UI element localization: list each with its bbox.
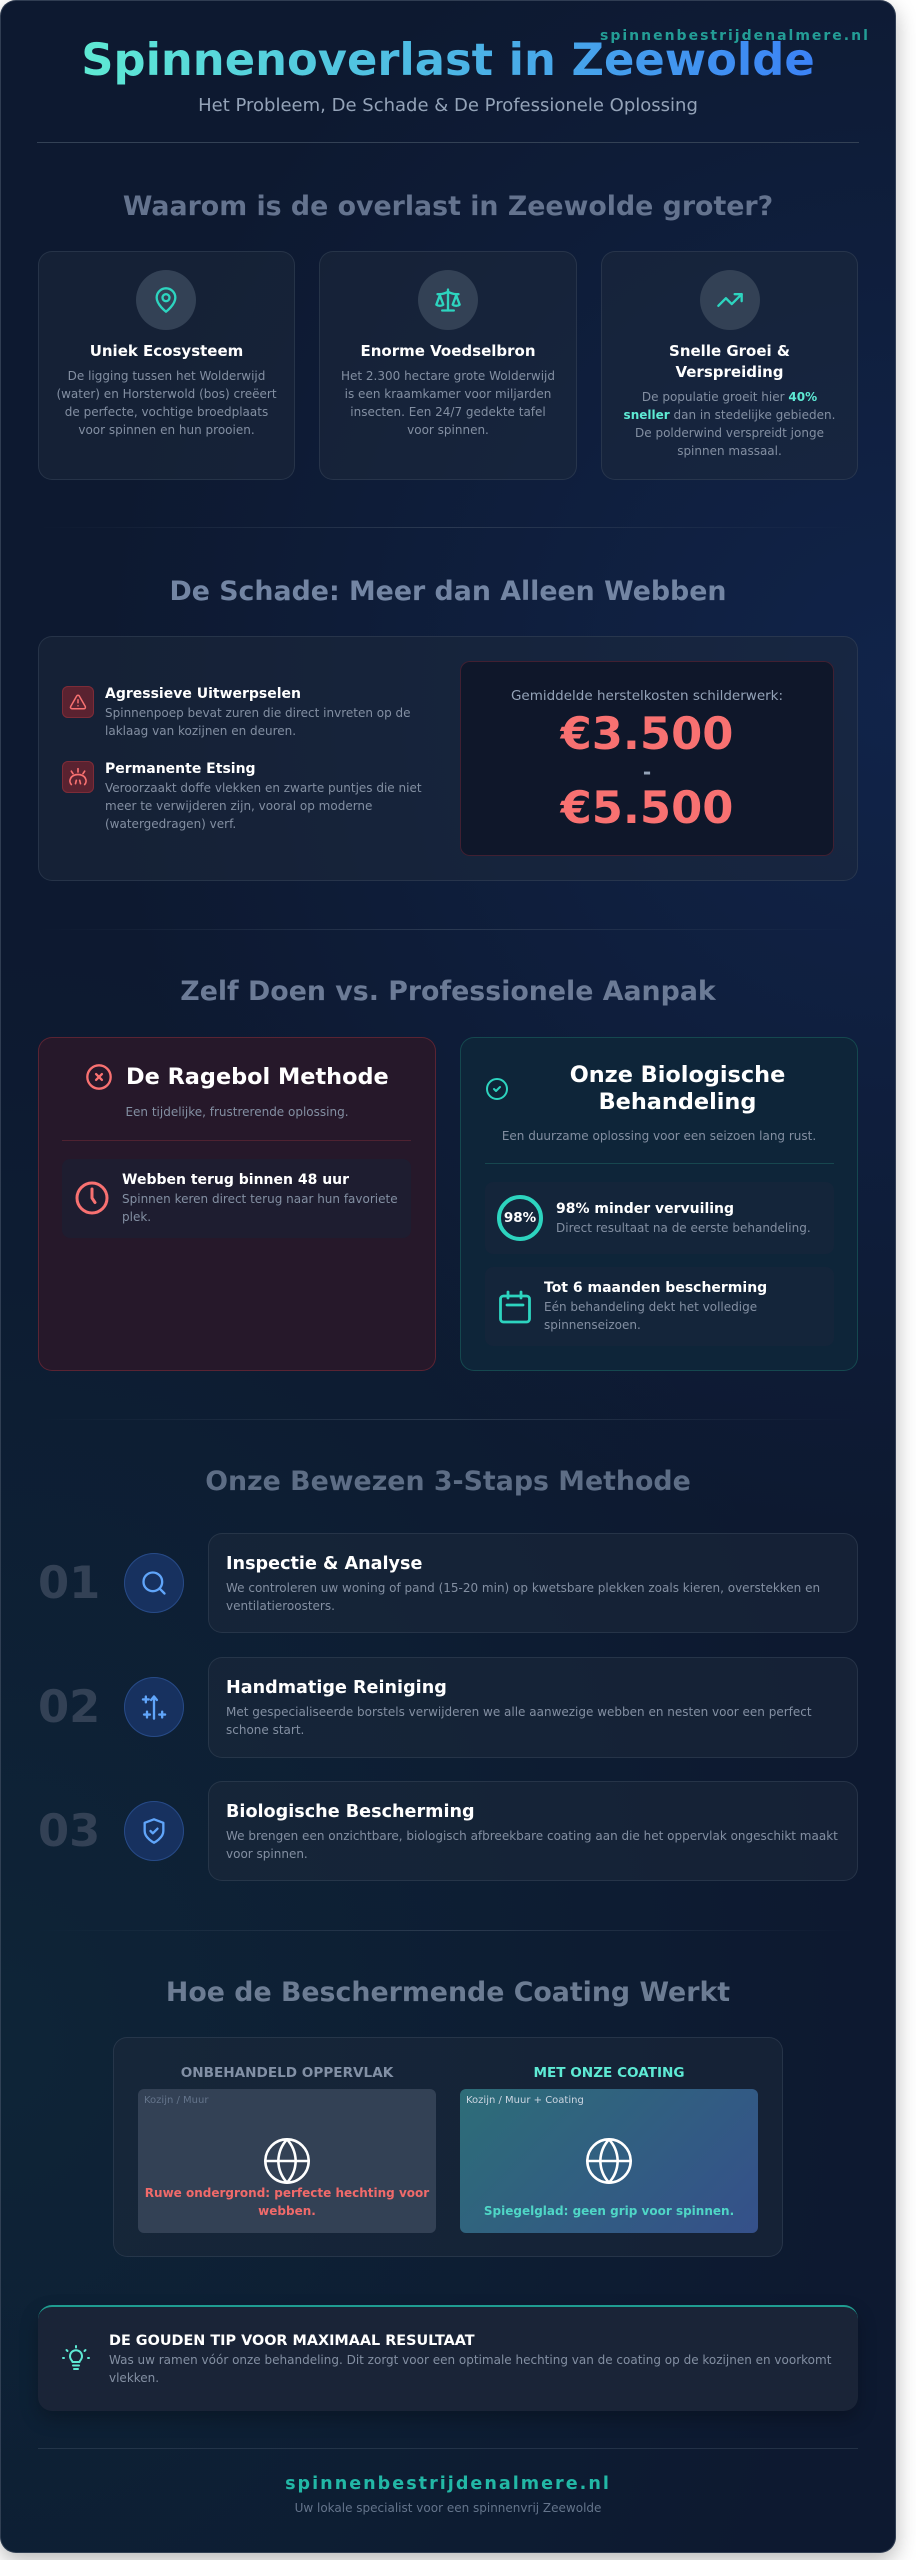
card title: Uniek Ecosysteem <box>90 342 243 360</box>
card title <box>669 342 790 381</box>
card text <box>341 369 555 437</box>
callout text: Was uw ramen vóór onze behandeling. Dit zorgt voor een optimale hechting van de coating op de kozijnen en voorkomt <box>109 2353 831 2367</box>
step text: We controleren uw woning of pand (15-20 min) op kwetsbare plekken zoals kieren, overstekken en <box>226 1581 820 1595</box>
cost low: €3.500 <box>561 707 733 760</box>
cost dash: - <box>643 760 651 784</box>
step text: schone start. <box>226 1723 304 1737</box>
panel: coating comparison <box>113 2037 783 2257</box>
step title: Inspectie & Analyse <box>226 1554 422 1574</box>
damage item: uitwerpselen <box>62 686 411 738</box>
surface result text: Spiegelglad: geen grip voor spinnen. <box>484 2204 734 2218</box>
icon: trending up <box>700 270 760 330</box>
callout text <box>109 2353 832 2385</box>
surface: coated <box>460 2089 758 2233</box>
panel subtitle: Een duurzame oplossing voor een seizoen lang rust. <box>502 1129 816 1143</box>
icon: x circle <box>86 1064 112 1090</box>
item text <box>105 781 422 831</box>
card text: voor spinnen. <box>407 423 489 437</box>
item title: 98% minder vervuiling <box>556 1201 734 1217</box>
step title: Handmatige Reiniging <box>226 1678 447 1698</box>
panel: ragebol <box>38 1037 436 1371</box>
step 2 <box>38 1657 858 1758</box>
item: 98 procent <box>485 1182 834 1254</box>
icon: warning <box>62 686 94 718</box>
step number: 03 <box>38 1804 100 1857</box>
item text: Eén behandeling dekt het volledige <box>544 1300 757 1314</box>
ring: 98%: 98% <box>504 1210 536 1226</box>
icon: shield check <box>124 1801 184 1861</box>
item title: Tot 6 maanden bescherming <box>544 1280 767 1296</box>
step 1 <box>38 1533 858 1633</box>
item text: meer te verwijderen zijn, vooral op moderne <box>105 799 372 813</box>
subtitle: Het Probleem, De Schade & De Professionele Oplossing <box>198 95 698 116</box>
step card <box>208 1657 858 1758</box>
item text <box>105 706 411 738</box>
panel: schade <box>38 636 858 881</box>
panel: uniek ecosysteem <box>38 251 295 480</box>
item: 48 uur <box>62 1159 411 1238</box>
footer domain: spinnenbestrijdenalmere.nl <box>285 2474 611 2494</box>
surface caption: Kozijn / Muur <box>144 2095 208 2106</box>
step text <box>226 1705 812 1737</box>
item title: Permanente Etsing <box>105 761 256 777</box>
label: coated: MET ONZE COATING <box>533 2065 685 2081</box>
panel title <box>570 1062 785 1115</box>
cost box <box>460 661 834 856</box>
item text: Direct resultaat na de eerste behandeling. <box>556 1221 811 1235</box>
icon: globe <box>264 2138 310 2184</box>
icon: calendar <box>499 1290 531 1324</box>
card text: voor spinnen en hun prooien. <box>78 423 255 437</box>
panel subtitle: Een tijdelijke, frustrerende oplossing. <box>125 1105 349 1119</box>
panel: snelle groei <box>601 251 858 480</box>
item text <box>122 1192 398 1224</box>
title: Spinnenoverlast in Zeewolde <box>81 33 815 86</box>
label: untreated: ONBEHANDELD OPPERVLAK <box>181 2065 393 2081</box>
item text: Spinnen keren direct terug naar hun favoriete <box>122 1192 398 1206</box>
cost high: €5.500 <box>561 781 733 834</box>
icon: check circle <box>486 1078 508 1100</box>
surface result text: Ruwe ondergrond: perfecte hechting voor <box>145 2186 429 2200</box>
item text <box>544 1300 757 1332</box>
icon: scale <box>418 270 478 330</box>
step text: Met gespecialiseerde borstels verwijderen we alle aanwezige webben en nesten voor een perfect <box>226 1705 812 1719</box>
heading: zelf doen: Zelf Doen vs. Professionele Aanpak <box>180 976 716 1007</box>
panel title: De Ragebol Methode <box>126 1064 389 1090</box>
item text: (watergedragen) verf. <box>105 817 236 831</box>
icon: bug <box>62 761 94 793</box>
card text: is een kraamkamer voor miljarden <box>345 387 551 401</box>
card text: sneller dan in stedelijke gebieden. <box>624 408 835 422</box>
step text: ventilatieroosters. <box>226 1599 335 1613</box>
step title: Biologische Bescherming <box>226 1802 475 1822</box>
item title: Agressieve Uitwerpselen <box>105 686 301 702</box>
surface: untreated <box>138 2089 436 2233</box>
step text: We brengen een onzichtbare, biologisch afbreekbare coating aan die het oppervlak ongeschikt maakt <box>226 1829 838 1843</box>
step card <box>208 1533 858 1633</box>
step text <box>226 1829 838 1861</box>
step 3 <box>38 1781 858 1881</box>
heading: waarom: Waarom is de overlast in Zeewolde groter? <box>123 191 773 222</box>
step number: 02 <box>38 1680 100 1733</box>
step text: voor spinnen. <box>226 1847 308 1861</box>
icon: lightbulb <box>62 2345 90 2370</box>
card text: De populatie groeit hier 40% <box>642 390 817 404</box>
heading: coating: Hoe de Beschermende Coating Werkt <box>166 1977 730 2008</box>
card text <box>624 390 835 458</box>
icon: brush sparkles <box>124 1677 184 1737</box>
card title: Snelle Groei & <box>669 342 790 360</box>
card title: Enorme Voedselbron <box>360 342 536 360</box>
card text: (water) en Horsterwold (bos) creëert <box>56 387 277 401</box>
card text: De ligging tussen het Wolderwijd <box>68 369 265 383</box>
panel title: Onze Biologische <box>570 1062 785 1088</box>
step number: 01 <box>38 1556 100 1609</box>
callout: gouden tip <box>38 2305 858 2411</box>
surface result text: webben. <box>258 2204 316 2218</box>
card text: De polderwind verspreidt jonge <box>635 426 824 440</box>
panel: biologische behandeling <box>460 1037 858 1371</box>
card text: insecten. Een 24/7 gedekte tafel <box>350 405 546 419</box>
callout title: DE GOUDEN TIP VOOR MAXIMAAL RESULTAAT <box>109 2333 475 2349</box>
item: 6 maanden <box>485 1267 834 1346</box>
item text: plek. <box>122 1210 151 1224</box>
heading: de schade: De Schade: Meer dan Alleen Webben <box>170 576 726 607</box>
step text <box>226 1581 820 1613</box>
icon: search <box>124 1553 184 1613</box>
card text <box>56 369 277 437</box>
panel: enorme voedselbron <box>319 251 577 480</box>
panel title: Behandeling <box>599 1089 756 1115</box>
damage item: etsing <box>62 761 422 831</box>
step card <box>208 1781 858 1881</box>
card text: de perfecte, vochtige broedplaats <box>65 405 268 419</box>
icon: clock <box>76 1182 108 1214</box>
item title: Webben terug binnen 48 uur <box>122 1172 349 1188</box>
surface result text <box>145 2186 430 2218</box>
watermark domain: spinnenbestrijdenalmere.nl <box>600 28 870 44</box>
footer tagline: Uw lokale specialist voor een spinnenvrij Zeewolde <box>295 2501 601 2515</box>
cost label: Gemiddelde herstelkosten schilderwerk: <box>511 688 783 704</box>
item text: Veroorzaakt doffe vlekken en zwarte puntjes die niet <box>105 781 422 795</box>
card text: spinnen massaal. <box>677 444 782 458</box>
icon: map pin <box>136 270 196 330</box>
callout text: vlekken. <box>109 2371 159 2385</box>
card text: Het 2.300 hectare grote Wolderwijd <box>341 369 555 383</box>
card title: Verspreiding <box>675 363 784 381</box>
icon: globe <box>586 2138 632 2184</box>
surface caption: Kozijn / Muur + Coating <box>466 2095 584 2106</box>
item text: Spinnenpoep bevat zuren die direct invreten op de <box>105 706 411 720</box>
item text: spinnenseizoen. <box>544 1318 641 1332</box>
item text: laklaag van kozijnen en deuren. <box>105 724 296 738</box>
heading: 3-staps: Onze Bewezen 3-Staps Methode <box>205 1466 691 1497</box>
ring: 98% <box>497 1195 543 1241</box>
